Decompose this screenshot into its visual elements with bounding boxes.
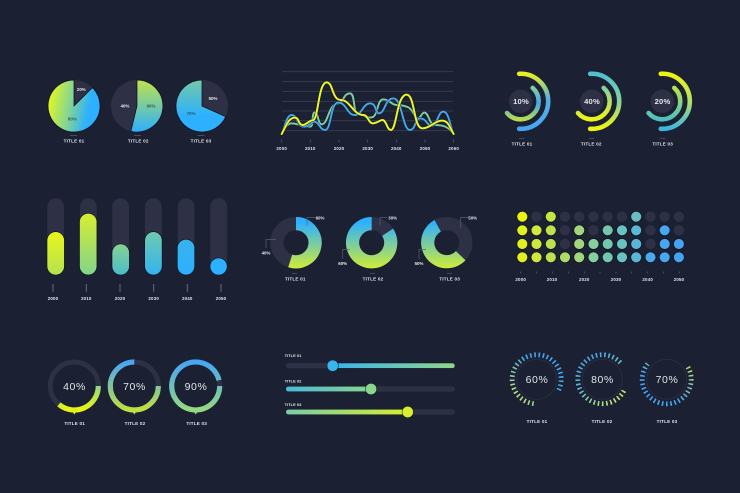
bar chart x axis labels: 2050: [216, 296, 227, 301]
bar chart x axis labels: [48, 296, 227, 301]
line chart x axis labels: 2040: [391, 146, 402, 151]
donut chart 02: [338, 215, 397, 281]
ring gauge 90%: 90%: [185, 381, 207, 393]
donut chart 03: [415, 215, 477, 281]
tick gauge 80%: [578, 355, 624, 424]
pie chart 03: TITLE 03: [191, 138, 212, 144]
dot matrix x axis labels: 2030: [611, 277, 622, 282]
panel: concentric arc gauges: [507, 74, 690, 146]
arc gauge 02: 40%: [584, 97, 600, 106]
slider 03: [285, 402, 455, 418]
donut chart 02: 60%: [338, 261, 347, 266]
slider 02: [285, 378, 455, 395]
bar 2020: [112, 198, 129, 275]
dot matrix x axis labels: 2000: [515, 277, 526, 282]
line chart x axis labels: 2030: [362, 146, 373, 151]
donut chart 01: 40%: [262, 250, 270, 256]
donut chart 03: 50%: [415, 261, 423, 266]
slider 03: TITLE 03: [285, 402, 302, 407]
donut chart 01: TITLE 01: [285, 276, 306, 281]
donut chart 01: [262, 215, 324, 281]
pie chart 02: TITLE 02: [128, 138, 149, 144]
tick gauge 70%: TITLE 03: [657, 419, 678, 424]
arc gauge 01: [507, 74, 548, 146]
donut chart 02: TITLE 02: [363, 276, 384, 281]
ring gauge 40%: 40%: [63, 381, 86, 393]
tick gauge 70%: [642, 359, 691, 424]
line series: blue: [282, 98, 454, 134]
arc gauge 02: TITLE 02: [581, 141, 602, 146]
bar 2040: [177, 198, 195, 275]
panel: donut charts: [262, 215, 477, 281]
ring gauge 40%: [50, 362, 98, 426]
pie chart 02: 60%: [147, 104, 155, 108]
tick gauge 60%: TITLE 01: [527, 419, 548, 424]
bar chart x axis labels: 2040: [182, 296, 193, 301]
dot matrix x axis labels: 2040: [642, 277, 653, 282]
bar chart x axis labels: 2000: [48, 296, 59, 301]
slider 01: TITLE 01: [285, 353, 302, 358]
arc gauge 03: TITLE 03: [652, 141, 673, 146]
line chart x axis labels: [276, 146, 459, 151]
donut chart 01: 60%: [316, 215, 324, 220]
pie chart 01: [48, 80, 100, 144]
ring gauge 70%: 70%: [123, 381, 146, 393]
donut chart 03: TITLE 03: [439, 276, 460, 281]
line chart x axis labels: 2050: [420, 146, 431, 151]
dot matrix x axis labels: 2050: [674, 277, 685, 282]
panel: line chart: [276, 72, 459, 151]
panel: tick ring gauges: [512, 355, 691, 424]
arc gauge 01: 10%: [513, 97, 529, 106]
panel: ring progress gauges: [50, 362, 220, 426]
dot matrix x axis labels: 2020: [579, 277, 590, 282]
slider 01: [285, 353, 455, 371]
arc gauge 02: [578, 74, 619, 146]
panel: pie charts: [48, 80, 228, 144]
ring gauge 70%: [110, 362, 158, 426]
line chart x axis labels: 2060: [448, 146, 459, 151]
pie chart 03: [176, 80, 228, 144]
tick gauge 60%: 60%: [526, 374, 548, 386]
bar chart x axis labels: 2030: [148, 296, 159, 301]
tick gauge 80%: TITLE 02: [592, 419, 613, 424]
donut chart 02: 30%: [388, 215, 397, 220]
panel: dot matrix chart: [515, 211, 685, 282]
line chart x axis labels: 2000: [276, 146, 287, 151]
pie chart 03: 70%: [187, 111, 195, 116]
panel: sliders: [285, 353, 455, 418]
panel: vertical bar chart: [47, 198, 227, 301]
bar 2050: [210, 198, 227, 275]
inactive dots: [531, 212, 684, 249]
tick gauge 60%: [512, 355, 561, 424]
bar 2010: [80, 198, 97, 275]
ring gauge 90%: [172, 362, 220, 426]
arc gauge 03: [649, 74, 690, 146]
ring gauge 70%: TITLE 02: [125, 421, 146, 426]
arc gauge 03: 20%: [655, 97, 670, 106]
ring gauge 90%: TITLE 03: [186, 421, 207, 426]
dot matrix x axis labels: 2010: [547, 277, 558, 282]
bar 2000: [47, 198, 64, 275]
line chart x axis labels: 2010: [305, 146, 316, 151]
pie chart 02: [111, 80, 163, 144]
pie chart 01: TITLE 01: [64, 138, 85, 144]
line series: green: [282, 93, 454, 134]
donut chart 03: 50%: [468, 215, 477, 220]
line chart x axis labels: 2020: [334, 146, 345, 151]
bar 2030: [145, 198, 162, 275]
ring gauge 40%: TITLE 01: [64, 421, 85, 426]
pie chart 02: 40%: [121, 104, 129, 108]
line series: yellow: [282, 82, 454, 134]
arc gauge 01: TITLE 01: [512, 141, 533, 146]
pie chart 01: 80%: [68, 116, 77, 122]
dot matrix x axis labels: [515, 277, 685, 282]
bar chart x axis labels: 2020: [115, 296, 126, 301]
tick gauge 70%: 70%: [656, 374, 678, 386]
pie chart 03: 50%: [209, 96, 217, 101]
slider 02: TITLE 02: [285, 378, 302, 384]
active dots: [517, 211, 684, 263]
tick gauge 80%: 80%: [591, 374, 614, 386]
pie chart 01: 20%: [77, 87, 86, 92]
bar chart x axis labels: 2010: [81, 296, 92, 301]
